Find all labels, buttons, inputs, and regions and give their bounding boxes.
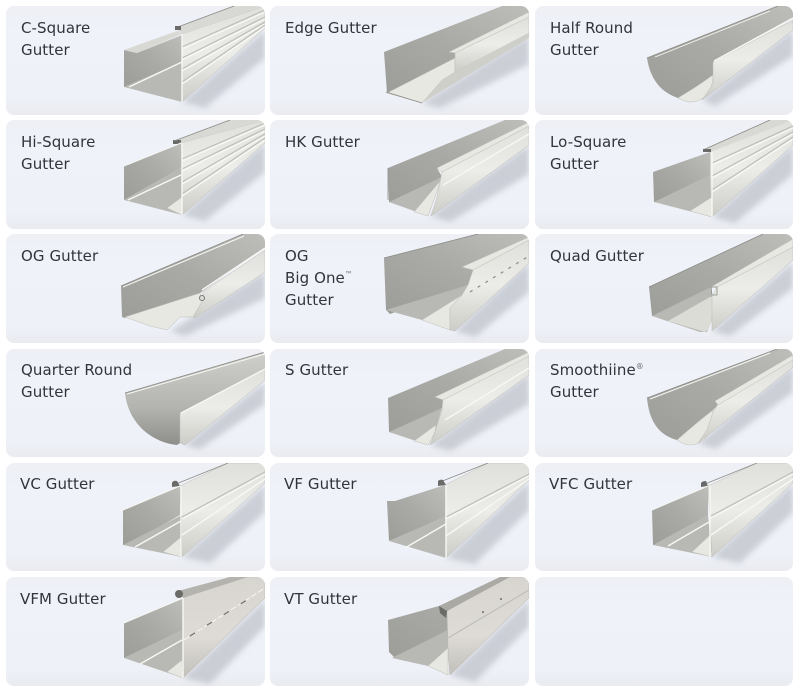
label: Smoothiine Gutter: Smoothiine® [550, 361, 644, 379]
panel: VFM Gutter [6, 577, 265, 686]
panel: VT Gutter [270, 577, 529, 686]
label: C-Square Gutter: Gutter [21, 41, 70, 59]
label: Quarter Round Gutter: Quarter Round [21, 361, 132, 379]
label: Half Round Gutter [550, 19, 633, 59]
panel: Quad Gutter [535, 234, 793, 343]
label: C-Square Gutter [21, 19, 90, 59]
icon: Quad gutter profile [648, 234, 793, 337]
label: Hi-Square Gutter: Hi-Square [21, 133, 95, 151]
icon: VFM gutter profile [124, 577, 265, 685]
label: Quarter Round Gutter [21, 361, 132, 401]
label: Half Round Gutter: Half Round [550, 19, 633, 37]
panel: S Gutter [270, 349, 529, 457]
panel: VC Gutter [6, 463, 265, 571]
icon: OG Big One gutter profile [384, 234, 529, 338]
label: OG Big One Gutter: Gutter [285, 291, 334, 309]
label: Hi-Square Gutter: Gutter [21, 155, 70, 173]
label: Edge Gutter: Edge Gutter [285, 19, 377, 37]
label: Half Round Gutter: Gutter [550, 41, 599, 59]
panel: VF Gutter [270, 463, 529, 571]
label: Hi-Square Gutter [21, 133, 95, 173]
panel: empty card [535, 577, 793, 686]
panel: Half Round Gutter [535, 6, 793, 115]
label: C-Square Gutter: C-Square [21, 19, 90, 37]
icon: Edge gutter profile [384, 6, 529, 110]
panel: VFC Gutter [535, 463, 793, 571]
label: Smoothiine Gutter: Gutter [550, 383, 599, 401]
label: Quad Gutter: Quad Gutter [550, 247, 644, 265]
label: Lo-Square Gutter: Gutter [550, 155, 599, 173]
icon: Half Round gutter profile [646, 6, 793, 107]
label: Lo-Square Gutter: Lo-Square [550, 133, 626, 151]
panel: Lo-Square Gutter [535, 120, 793, 229]
icon: OG gutter profile [120, 234, 265, 337]
icon: VT gutter profile [388, 577, 529, 683]
label: VC Gutter: VC Gutter [20, 475, 95, 493]
icon: C-Square gutter profile [124, 6, 265, 109]
icon: S gutter profile [388, 349, 529, 452]
icon: VF gutter profile [387, 463, 529, 565]
label: VT Gutter: VT Gutter [284, 590, 357, 608]
panel: Quarter Round Gutter [6, 349, 265, 457]
label: VF Gutter: VF Gutter [284, 475, 357, 493]
panel: OG Big One Gutter [270, 234, 529, 343]
label: VFM Gutter: VFM Gutter [20, 590, 106, 608]
icon: Quarter Round gutter profile [124, 352, 265, 450]
label: OG Big One Gutter: Big One™ [285, 269, 353, 287]
icon: VFC gutter profile [652, 463, 793, 564]
icon: Lo-Square gutter profile [653, 120, 793, 224]
label: OG Big One Gutter [285, 247, 353, 309]
label: Quarter Round Gutter: Gutter [21, 383, 70, 401]
label: OG Big One Gutter: OG [285, 247, 309, 265]
icon: VC gutter profile [123, 463, 265, 564]
icon: HK gutter profile [388, 120, 529, 223]
panel: Hi-Square Gutter [6, 120, 265, 229]
label: Lo-Square Gutter [550, 133, 626, 173]
icon: Smoothline gutter profile [646, 349, 793, 450]
panel: C-Square Gutter [6, 6, 265, 115]
label: Smoothiine Gutter [550, 361, 644, 401]
panel: HK Gutter [270, 120, 529, 229]
label: OG Gutter: OG Gutter [21, 247, 98, 265]
panel: OG Gutter [6, 234, 265, 343]
icon: Hi-Square gutter profile [124, 120, 265, 222]
label: VFC Gutter: VFC Gutter [549, 475, 632, 493]
label: S Gutter: S Gutter [285, 361, 348, 379]
panel: Edge Gutter [270, 6, 529, 115]
panel: Smoothline Gutter [535, 349, 793, 457]
label: HK Gutter: HK Gutter [285, 133, 360, 151]
